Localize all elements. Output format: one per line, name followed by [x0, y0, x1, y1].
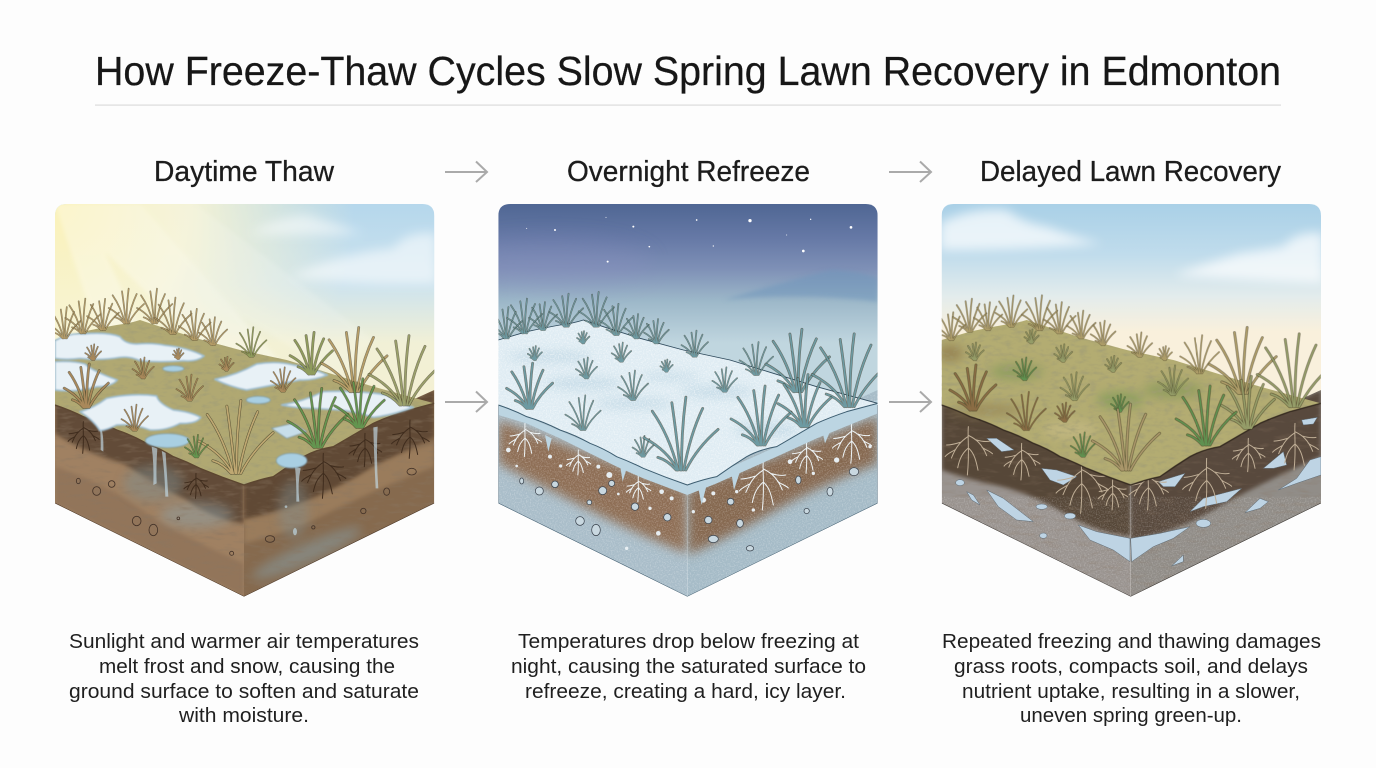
stars — [526, 217, 852, 263]
heading: Delayed Lawn Recovery: Delayed Lawn Recovery — [980, 156, 1281, 188]
text block: delayed lawn recovery description — [942, 630, 1321, 727]
ice lenses — [956, 417, 1321, 566]
heading: Overnight Refreeze: Overnight Refreeze — [567, 156, 810, 188]
clouds — [250, 215, 437, 284]
text block: daytime thaw description: Sunlight and warmer air temperatures — [69, 630, 419, 653]
pebbles — [76, 468, 416, 555]
soil: left face — [55, 406, 244, 596]
block outline — [942, 503, 1321, 597]
heading: Daytime Thaw: Daytime Thaw — [154, 156, 335, 188]
soil: left face — [940, 390, 1133, 600]
text block: overnight refreeze description: Temperatures drop below freezing at — [518, 630, 859, 653]
clouds — [940, 209, 1323, 283]
sky with sun rays — [53, 203, 437, 437]
soil: right face — [243, 390, 437, 600]
patchy lawn surface — [937, 320, 1321, 485]
panel: overnight refreeze illustration — [498, 204, 878, 596]
distant hills — [732, 272, 878, 302]
panel: delayed lawn recovery illustration — [937, 203, 1331, 600]
meltwater drips — [99, 425, 378, 535]
roots — [68, 420, 429, 498]
block outline — [55, 503, 434, 597]
title: How Freeze-Thaw Cycles Slow Spring Lawn Recovery in Edmonton — [95, 48, 1281, 94]
text block: delayed lawn recovery description: nutrient uptake, resulting in a slower, — [962, 680, 1300, 703]
text block: delayed lawn recovery description: uneven spring green-up. — [1020, 704, 1242, 727]
text block: daytime thaw description: ground surface to soften and saturate — [69, 680, 419, 703]
snow patches — [55, 333, 413, 431]
panel: daytime thaw illustration — [49, 203, 440, 600]
puddles — [145, 366, 307, 468]
snow surface — [498, 320, 878, 485]
night sky — [498, 204, 878, 398]
text block: overnight refreeze description: refreeze, creating a hard, icy layer. — [525, 680, 846, 703]
ice band and icicles — [498, 400, 878, 505]
ice crystals in soil — [506, 445, 872, 550]
text block: daytime thaw description — [69, 630, 419, 727]
soil: right face — [687, 390, 880, 600]
grass tufts — [49, 289, 440, 473]
frost-coated roots — [509, 423, 872, 510]
daytime sky — [940, 203, 1323, 437]
block outline — [498, 405, 878, 597]
arrow: heading 2 to heading 3 — [889, 162, 931, 182]
text block: overnight refreeze description — [511, 630, 866, 703]
frozen pebbles — [520, 468, 859, 551]
text block: delayed lawn recovery description: grass roots, compacts soil, and delays — [954, 655, 1308, 678]
text block: overnight refreeze description: night, causing the saturated surface to — [511, 655, 866, 678]
dried and green grass tufts — [937, 295, 1331, 470]
arrow: illustration 1 to illustration 2 — [445, 392, 487, 412]
arrow: heading 1 to heading 2 — [445, 162, 487, 182]
arrow: illustration 2 to illustration 3 — [889, 392, 931, 412]
damaged roots — [945, 423, 1318, 513]
frosted grass tufts — [490, 292, 886, 470]
text block: daytime thaw description: with moisture. — [178, 704, 309, 727]
text block: daytime thaw description: melt frost and snow, causing the — [99, 655, 395, 678]
soil: right face — [1130, 390, 1323, 600]
text block: delayed lawn recovery description: Repeated freezing and thawing damages — [942, 630, 1321, 653]
soil: left face — [498, 415, 688, 596]
grass surface — [55, 320, 434, 485]
